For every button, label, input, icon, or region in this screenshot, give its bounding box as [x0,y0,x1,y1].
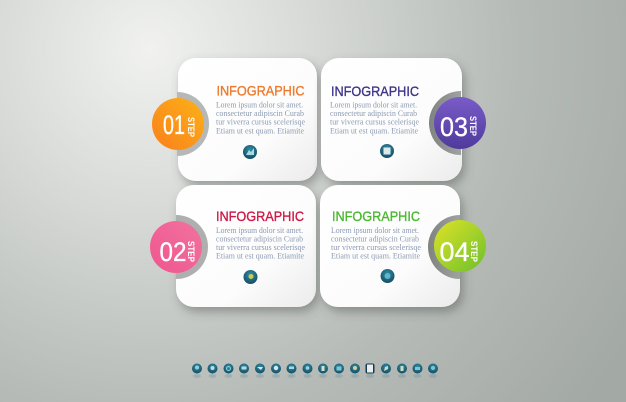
icon 04 [380,269,394,283]
text block 02: Etiam ut est quam. Etiamite [216,252,304,260]
heading 04: INFOGRAPHIC [332,208,420,224]
badge 01: 01 [163,110,185,140]
badge 02 [150,221,202,273]
text block 01: Lorem ipsum dolor sit amet. [216,100,303,110]
heading 03: INFOGRAPHIC [331,83,419,99]
badge 03 [434,97,486,149]
card 01 [178,58,317,181]
text block 03 [330,100,419,136]
badge 04 [434,220,486,272]
card 03 [321,58,462,181]
text block 04: Etiam ut est quam. Etiamite [331,252,420,260]
text block 01: tur viverra cursus scelerisqe [216,118,305,126]
panel: step 04 [320,185,486,307]
text block 04 [331,226,421,260]
icon 01 [243,145,257,159]
text block 03: Etiam ut est quam. Etiamite [330,126,418,136]
panel: step 03 [321,58,486,181]
icon 02 [244,270,258,284]
panel: step 02 [150,185,316,307]
text block 03: tur viverra cursus scelerisqe [330,118,419,126]
text block 04: consectetur adipiscin Curab [331,234,419,244]
ring 03 [429,91,461,155]
badge 01: STEP [185,117,196,138]
panel: step 01 [152,58,317,181]
heading 02: INFOGRAPHIC [216,208,304,224]
text block 01: Etiam ut est quam. Etiamite [216,126,304,136]
ring 04 [428,215,460,279]
text block 02: tur viverra cursus scelerisqe [216,243,305,252]
badge 02: STEP [185,241,196,263]
text block 01: consectetur adipiscin Curab [216,109,304,118]
text block 03: Lorem ipsum dolor sit amet. [330,100,417,110]
card 02 [176,185,316,307]
text block 02 [216,226,305,260]
text block 04: Lorem ipsum dolor sit amet. [331,226,419,235]
text block 04: tur viverra cursus scelerisqe [331,243,421,252]
card 04 [320,185,460,307]
text block 01 [216,100,305,136]
ring 02 [176,215,208,279]
text block 02: Lorem ipsum dolor sit amet. [216,226,303,235]
badge 04: 04 [440,237,470,267]
icon 03 [380,144,394,158]
badge 03: STEP [467,116,478,137]
heading 01: INFOGRAPHIC [216,82,304,98]
text block 03: consectetur adipiscin Curab [330,109,417,118]
badge 04: STEP [468,241,479,263]
badge 02: 02 [160,237,186,267]
icon row [192,364,438,378]
badge 03: 03 [440,112,468,142]
ring 01 [177,92,209,156]
text block 02: consectetur adipiscin Curab [216,234,303,244]
badge 01 [152,98,204,150]
